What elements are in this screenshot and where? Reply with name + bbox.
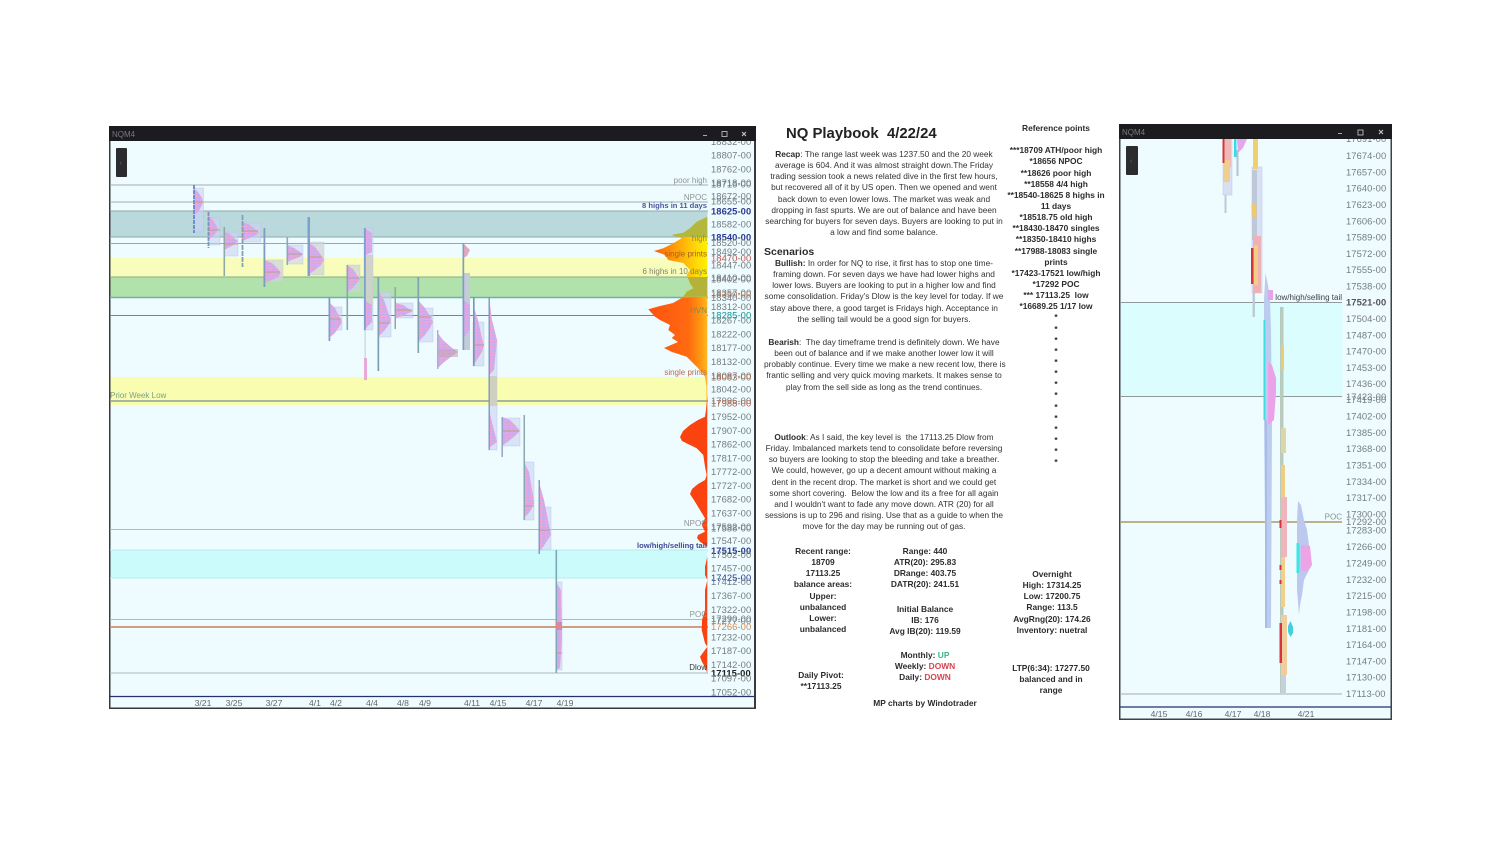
price axis: 17817-00 <box>711 452 751 464</box>
profile: 3/21 <box>194 185 204 233</box>
stats: trend <box>894 650 955 682</box>
text block: recap: but recovered all of it by US open. Then we opened and went <box>771 182 997 192</box>
stats: recent range: unbalanced <box>800 624 846 634</box>
price axis: 17181-00 <box>1346 623 1386 634</box>
price axis: 17187-00 <box>711 645 751 656</box>
stats: recent range <box>794 546 852 634</box>
time axis: 4/19 <box>557 698 574 708</box>
reference points list: * <box>1054 457 1058 467</box>
profile: 4/11 a <box>437 330 458 369</box>
reference points list: * <box>1054 446 1058 456</box>
price axis: 17772-00 <box>711 466 751 477</box>
volume profile: middle <box>648 297 707 402</box>
title bar: NQM4 <box>112 130 136 139</box>
price axis: 18177-00 <box>711 342 751 353</box>
price axis: 18520-00 <box>711 237 751 248</box>
reference points list: **18558 4/4 high <box>1024 179 1088 189</box>
reference points list: *17423-17521 low/high <box>1012 268 1100 278</box>
price axis: 17419-00 <box>1346 394 1386 405</box>
time axis: 4/8 <box>397 698 409 708</box>
price axis: 17457-00 <box>711 562 751 574</box>
text block: outlook: and I wouldn't want to fade any move down. ATR (20) for all <box>774 499 994 509</box>
reference points list: *** 17113.25 low <box>1023 290 1089 300</box>
reference points list <box>1007 123 1105 467</box>
profile: 4/12 <box>473 297 484 366</box>
price axis: 18312-00 <box>711 301 751 312</box>
text block: recap: back down to even lower lows. The market was weak and <box>778 194 990 204</box>
price axis: 17292-00 <box>1346 516 1386 527</box>
price axis: 17547-00 <box>711 535 751 546</box>
reference points list: *18518.75 old high <box>1019 212 1093 222</box>
price axis: 17283-00 <box>1346 524 1386 536</box>
price axis: 18410-00 <box>711 272 751 283</box>
stats: last traded price: range <box>1040 685 1062 695</box>
price axis: 17097-00 <box>711 672 751 684</box>
profile C <box>1251 139 1262 317</box>
time axis: 4/15 <box>1151 709 1168 719</box>
price axis: 17521-00 <box>1346 296 1386 308</box>
text block: bullish: stay above there, a good target is Fridays high. Acceptance in <box>770 303 998 313</box>
price axis: 17657-00 <box>1346 166 1386 178</box>
chart annotations: 6 highs in 10 days <box>642 267 707 276</box>
price axis: 17198-00 <box>1346 606 1386 618</box>
price axis: 17147-00 <box>1346 656 1386 666</box>
reference points list: **17988-18083 single <box>1015 246 1097 256</box>
price axis: 17334-00 <box>1346 476 1386 487</box>
text block: bullish: lower lows. Buyers are looking to put in a higher low and find <box>772 280 996 290</box>
reference points list: * <box>1054 379 1058 389</box>
title: NQ Playbook 4/22/24 <box>786 126 937 142</box>
text block: outlook <box>765 432 1003 531</box>
price axis: 18083-00 <box>711 372 751 382</box>
text block: recap: searching for buyers for seven days. Buyers are looking to put in <box>765 216 1003 226</box>
reference points list: * <box>1054 346 1058 356</box>
chart annotations: HVN <box>690 306 707 315</box>
price axis: 17637-00 <box>711 508 751 518</box>
chart annotations: low/high/selling tail <box>1275 293 1342 302</box>
profile: 4/5 <box>364 228 373 380</box>
text block: bullish: Bullish: In order for NQ to rise, it first has to stop one time- <box>775 258 993 268</box>
price axis: 17412-00 <box>711 576 751 587</box>
reference points list: * <box>1054 324 1058 334</box>
text block: recap: Recap: The range last week was 1237.50 and the 20 week <box>775 149 993 159</box>
chart annotations: low/high/selling tail <box>637 541 707 550</box>
price axis: 17588-00 <box>711 522 751 534</box>
price axis: 18470-00 <box>711 252 751 264</box>
profile: 4/4 <box>346 265 360 330</box>
text block: outlook: some short covering. Below the low and its a free for all again <box>769 488 999 498</box>
profile: 4/18 <box>538 480 551 554</box>
time axis: 3/21 <box>195 698 212 708</box>
reference points list: **18540-18625 8 highs in <box>1007 190 1105 200</box>
profile: 4/1 <box>286 237 303 265</box>
stats: overnight: Inventory: nuetral <box>1017 625 1087 635</box>
price axis: 17052-00 <box>711 686 751 698</box>
reference points list: **18626 poor high <box>1021 168 1091 178</box>
stats: recent range: 17113.25 <box>806 568 840 578</box>
stats: recent range: Recent range: <box>795 546 851 556</box>
profile: 4/16 <box>502 417 520 457</box>
time axis: 4/4 <box>366 698 378 708</box>
price axis: 17538-00 <box>1346 280 1386 292</box>
panel: right market profile chart <box>1119 124 1392 720</box>
price axis: 17623-00 <box>1346 199 1386 210</box>
price axis: 18357-00 <box>711 287 751 298</box>
price axis: 18087-00 <box>711 370 751 381</box>
text block: bearish: play from the sell side as long as the trend continues. <box>786 382 982 392</box>
price axis: 17589-00 <box>1346 232 1386 242</box>
stats: daily pivot: **17113.25 <box>800 681 842 691</box>
stats: range <box>891 546 959 589</box>
price axis: 17862-00 <box>711 438 751 450</box>
price axis: 17232-00 <box>711 632 751 642</box>
time axis: 4/11 <box>464 698 480 708</box>
price axis: 17322-00 <box>711 604 751 615</box>
profile: 3/27 <box>242 215 261 267</box>
text block: outlook: We could, however, go up a decent amount without making a <box>772 465 996 475</box>
price axis: 17232-00 <box>1346 574 1386 585</box>
stats: recent range: unbalanced <box>800 602 846 612</box>
text block: bearish: been out of balance and if we make another lower low it will <box>774 348 994 358</box>
text block: bearish <box>764 337 1006 392</box>
text block: outlook: Outlook: As I said, the key level is the 17113.25 Dlow from <box>774 432 994 442</box>
price axis: 17674-00 <box>1346 150 1386 161</box>
price axis: 17385-00 <box>1346 427 1386 438</box>
profile D <box>1264 273 1276 628</box>
price axis: 17425-00 <box>711 572 751 583</box>
stats: overnight: AvgRng(20): 174.26 <box>1013 614 1091 624</box>
price axis: 17142-00 <box>711 659 751 670</box>
price axis: 17988-00 <box>711 398 751 408</box>
price axis: 18718-00 <box>711 177 751 188</box>
time axis <box>110 696 754 708</box>
button: collapse side panel: ‹ <box>1130 158 1133 165</box>
time axis: 4/18 <box>1254 709 1271 719</box>
chart annotations: POC <box>1325 512 1342 522</box>
price axis: 18132-00 <box>711 356 751 367</box>
text block: bullish: some consolidation. Friday's Dlow is the key level for today. If we <box>765 291 1003 301</box>
chart annotations: single prints <box>664 368 707 377</box>
text block: outlook: Friday. Imbalanced markets tend to consolidate before reversing <box>766 443 1002 453</box>
daily market profiles <box>194 185 562 673</box>
price axis: 17640-00 <box>1346 182 1386 194</box>
reference points list: * <box>1054 335 1058 345</box>
price axis: 17682-00 <box>711 494 751 504</box>
price axis: 17164-00 <box>1346 639 1386 650</box>
time axis: 4/21 <box>1298 709 1315 719</box>
stats: overnight: Range: 113.5 <box>1026 602 1078 612</box>
reference points list: *17292 POC <box>1032 279 1080 289</box>
reference points list: **18430-18470 singles <box>1012 223 1100 233</box>
text block: bullish: the selling tail would be a good sign for buyers. <box>797 314 971 324</box>
chart annotations: Dlow <box>689 663 707 672</box>
price axis: 17436-00 <box>1346 378 1386 389</box>
stats: initial balance: IB: 176 <box>911 615 939 625</box>
stats: initial balance: Initial Balance <box>897 604 953 614</box>
stats: trend: Daily: DOWN <box>899 672 951 682</box>
price axis: 17691-00 <box>1346 133 1386 144</box>
text block: outlook: dent in the recent drop. The market is short and we could get <box>772 477 996 487</box>
price axis: 17290-00 <box>711 613 751 624</box>
stats: last traded price: balanced and in <box>1019 674 1083 684</box>
price axis <box>711 136 751 698</box>
chart annotations <box>1275 293 1342 522</box>
profile F <box>1288 621 1293 637</box>
title bar: NQM4 <box>1122 128 1146 137</box>
time axis: 3/27 <box>266 698 283 708</box>
price axis: 17592-00 <box>711 521 751 532</box>
price axis: 17277-00 <box>711 615 751 626</box>
text block: recap <box>765 149 1003 237</box>
stats: recent range: 18709 <box>811 557 835 567</box>
price axis: 17317-00 <box>1346 492 1386 503</box>
text block: outlook: so buyers are looking to stop the bleeding and take a breather. <box>769 454 999 464</box>
text block: recap: average is 604. And it was almost straight down.The Friday <box>775 160 993 170</box>
time axis <box>1120 707 1391 719</box>
stats: daily pivot <box>798 670 844 691</box>
profile G <box>1296 501 1312 615</box>
stats: overnight: High: 17314.25 <box>1023 580 1081 590</box>
price axis: 18402-00 <box>711 274 751 284</box>
reference points list: *18656 NPOC <box>1029 156 1083 166</box>
shaded price bands <box>110 211 708 578</box>
stats: trend: Monthly: UP <box>901 650 949 660</box>
profile A <box>1222 139 1232 213</box>
panel: left market profile chart <box>109 126 756 709</box>
price axis: 18807-00 <box>711 150 751 160</box>
price axis: 17115-00 <box>711 668 751 678</box>
button: collapse side panel <box>116 148 127 177</box>
reference points list: ***18709 ATH/poor high <box>1010 145 1102 155</box>
price axis: 18540-00 <box>711 232 751 242</box>
time axis: 4/15 <box>490 698 507 708</box>
selling tail band <box>1120 302 1342 396</box>
text block: outlook: sessions is up to 296 and rising. Use that as a guide to when the <box>765 510 1003 520</box>
volume profile: lower <box>680 395 707 673</box>
stats: recent range: Upper: <box>810 591 836 601</box>
price axis: 18285-00 <box>711 310 751 320</box>
profile: 4/19 <box>556 550 562 673</box>
chart annotations <box>110 176 707 672</box>
reference points list: *16689.25 1/17 low <box>1019 301 1093 311</box>
price axis: 18655-00 <box>711 196 751 206</box>
reference points list: **18350-18410 highs <box>1016 234 1096 244</box>
horizontal reference lines <box>110 185 708 673</box>
profile: 4/2 <box>308 217 324 276</box>
price axis: 17300-00 <box>1346 508 1386 520</box>
horizontal reference lines <box>1120 302 1342 694</box>
profile E <box>1280 307 1287 693</box>
text block: bearish: frantic selling and very quick moving markets. It makes sense to <box>766 370 1002 380</box>
price axis: 18340-00 <box>711 292 751 303</box>
profile: 4/17 a <box>524 415 534 520</box>
profile: 3/26 <box>224 227 238 276</box>
price axis: 17555-00 <box>1346 264 1386 275</box>
price axis: 17249-00 <box>1346 558 1386 568</box>
stats: recent range: balance areas: <box>794 579 852 589</box>
reference points list: Reference points <box>1022 123 1090 133</box>
stats: range: DRange: 403.75 <box>894 568 956 578</box>
chart annotations: 8 highs in 11 days <box>642 201 707 210</box>
reference points list: * <box>1054 357 1058 367</box>
price axis: 17952-00 <box>711 411 751 422</box>
price axis: 18672-00 <box>711 190 751 202</box>
price axis: 18625-00 <box>711 206 751 216</box>
stats: range: Range: 440 <box>903 546 947 556</box>
price axis: 18350-00 <box>711 288 751 300</box>
price axis: 17453-00 <box>1346 362 1386 373</box>
price axis: 17606-00 <box>1346 216 1386 226</box>
stats: overnight: Low: 17200.75 <box>1024 591 1080 601</box>
chart annotations: Prior Week Low <box>110 391 167 400</box>
profile: 4/8 <box>378 277 391 371</box>
price axis: 17504-00 <box>1346 313 1386 324</box>
profile: 3/28 <box>264 228 283 287</box>
price axis: 17996-00 <box>711 395 751 406</box>
stats: overnight <box>1013 569 1091 635</box>
price axis: 17515-00 <box>711 545 751 556</box>
stats: range: ATR(20): 295.83 <box>894 557 956 567</box>
reference points list: * <box>1054 424 1058 434</box>
reference points list: prints <box>1044 257 1068 267</box>
price axis <box>1346 133 1386 699</box>
time axis: 4/9 <box>419 698 431 708</box>
time axis: 4/2 <box>330 698 342 708</box>
price axis: 17907-00 <box>711 425 751 436</box>
price axis: 18447-00 <box>711 260 751 270</box>
price axis: 18762-00 <box>711 164 751 174</box>
time axis: 4/16 <box>1186 709 1203 719</box>
price axis: 18716-00 <box>711 178 751 190</box>
price axis: 18267-00 <box>711 314 751 326</box>
reference points list: * <box>1054 402 1058 412</box>
profile: 4/15 <box>488 297 497 450</box>
price axis: 17572-00 <box>1346 248 1386 259</box>
chart annotations: POC <box>690 610 707 619</box>
price axis: 17487-00 <box>1346 330 1386 340</box>
price axis: 18492-00 <box>711 246 751 257</box>
volume profile: upper <box>654 216 708 297</box>
reference points list: * <box>1054 368 1058 378</box>
profile: 4/10 <box>418 277 433 353</box>
reference points list: * <box>1054 413 1058 423</box>
time axis: 4/17 <box>1225 709 1242 719</box>
price axis: 17215-00 <box>1346 590 1386 601</box>
price axis: 17130-00 <box>1346 672 1386 682</box>
profile: 4/9 <box>394 287 413 329</box>
chart annotations: NPOC <box>684 193 707 202</box>
profile: 3/25 <box>208 212 220 248</box>
button: collapse side panel <box>1126 146 1138 175</box>
price axis: 17113-00 <box>1346 688 1386 699</box>
price axis: 17368-00 <box>1346 443 1386 454</box>
stats: initial balance <box>889 604 961 636</box>
price axis: 17367-00 <box>711 590 751 601</box>
price axis: 18832-00 <box>711 136 751 147</box>
profile B <box>1234 139 1247 176</box>
reference points list: * <box>1054 390 1058 400</box>
profile: 4/11 b <box>462 243 470 350</box>
price axis: 17727-00 <box>711 480 751 491</box>
time axis: 4/17 <box>526 698 543 708</box>
price axis: 17351-00 <box>1346 460 1386 470</box>
stats: trend: Weekly: DOWN <box>895 661 955 671</box>
price axis: 17266-00 <box>711 621 751 632</box>
price axis: 18222-00 <box>711 328 751 340</box>
title bar <box>109 126 756 141</box>
price axis: 17470-00 <box>1346 346 1386 356</box>
chart annotations: poor high <box>674 176 707 185</box>
reference points list: * <box>1054 435 1058 445</box>
text block: recap: trading session took a news related dive in the first few hours, <box>770 171 998 181</box>
stats: overnight: Overnight <box>1032 569 1072 579</box>
price axis: 18582-00 <box>711 218 751 230</box>
text block: recap: dropping in fast spurts. We are out of balance and have been <box>771 205 997 215</box>
credit: MP charts by Windotrader <box>873 698 977 708</box>
price axis: 17423-00 <box>1346 391 1386 402</box>
chart annotations: NPOC <box>684 519 707 528</box>
stats: recent range: Lower: <box>809 613 837 623</box>
chart annotations: single prints <box>664 250 707 258</box>
text block: bearish: probably continue. Every time we make a new recent low, there is <box>764 359 1006 369</box>
reference points list: * <box>1054 312 1058 322</box>
stats: last traded price <box>1012 663 1090 695</box>
daily profiles <box>1222 139 1312 693</box>
chart annotations: high <box>692 234 707 243</box>
price axis: 17266-00 <box>1346 541 1386 552</box>
title bar <box>1119 124 1392 139</box>
text block: bearish: Bearish: The day timeframe trend is definitely down. We have <box>768 337 1000 347</box>
reference points list: 11 days <box>1041 201 1071 211</box>
time axis: 3/25 <box>226 698 243 708</box>
text block: bullish: framing down. For seven days we have had lower highs and <box>773 269 995 279</box>
stats: last traded price: LTP(6:34): 17277.50 <box>1012 663 1090 673</box>
time axis: 4/1 <box>309 698 321 708</box>
stats: range: DATR(20): 241.51 <box>891 579 959 589</box>
price axis: 18042-00 <box>711 384 751 394</box>
text block: recap: a low and find some balance. <box>830 227 938 237</box>
heading: scenarios: Scenarios <box>764 246 814 258</box>
button: collapse side panel: ‹ <box>120 160 122 167</box>
profile: 4/3 <box>328 297 342 341</box>
text block: outlook: move for the day may be running out of gas. <box>803 521 965 531</box>
text block: bullish <box>764 258 1003 324</box>
stats: initial balance: Avg IB(20): 119.59 <box>889 626 961 636</box>
stats: daily pivot: Daily Pivot: <box>798 670 844 680</box>
price axis: 17502-00 <box>711 549 751 560</box>
price axis: 17402-00 <box>1346 410 1386 422</box>
